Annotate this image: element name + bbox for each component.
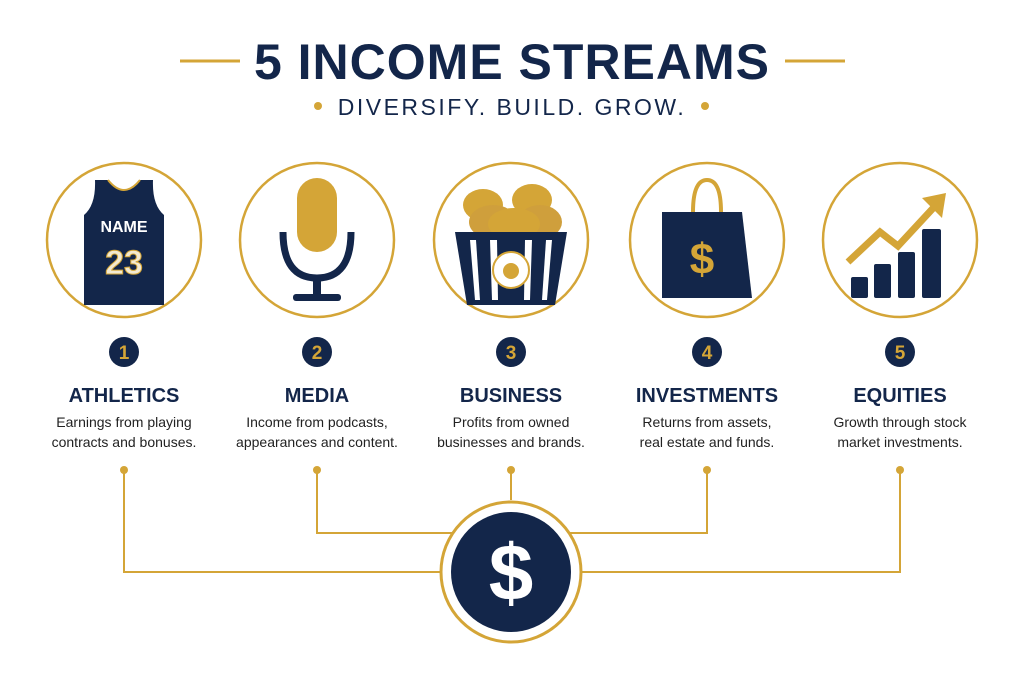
panel: equities (823, 163, 977, 450)
panel: media: 2 (312, 343, 322, 364)
panel: media (236, 163, 398, 450)
panel: media: MEDIA (285, 385, 349, 407)
panel: investments: Returns from assets, (642, 414, 772, 430)
panel: equities: EQUITIES (853, 385, 947, 407)
panel: media: Income from podcasts, (246, 414, 388, 430)
panel: athletics: ATHLETICS (69, 385, 179, 407)
panel: media: appearances and content. (236, 434, 398, 450)
title: 5 INCOME STREAMS (254, 34, 770, 90)
central dollar icon: $ (489, 528, 533, 617)
panel: equities: Growth through stock (833, 414, 968, 430)
icon: jersey (84, 180, 164, 305)
icon: jersey: NAME (100, 219, 148, 236)
panel: investments: INVESTMENTS (636, 385, 778, 407)
panel: business: businesses and brands. (437, 434, 585, 450)
panel: business: BUSINESS (460, 385, 562, 407)
icon: shopping bag: $ (690, 235, 714, 284)
connector lines (120, 466, 904, 572)
panel: athletics: Earnings from playing (56, 414, 192, 430)
panel: athletics: 1 (119, 343, 130, 364)
panel: investments (630, 163, 784, 450)
icon: chicken bucket (455, 184, 567, 305)
panel: business: Profits from owned (453, 414, 569, 430)
icon: shopping bag (662, 180, 752, 298)
panel: equities: market investments. (837, 434, 963, 450)
subtitle: DIVERSIFY. BUILD. GROW. (338, 94, 686, 120)
panel: equities: 5 (895, 343, 906, 364)
icon: jersey: 23 (105, 244, 143, 282)
panel: athletics: contracts and bonuses. (52, 434, 196, 450)
central dollar icon (441, 502, 581, 642)
panel: business (434, 163, 588, 450)
panel: business: 3 (506, 343, 516, 364)
panel: investments: 4 (702, 343, 713, 364)
icon: microphone (283, 178, 351, 301)
panel: investments: real estate and funds. (640, 434, 774, 450)
icon: growth chart (848, 193, 946, 298)
panel: athletics (47, 163, 201, 450)
